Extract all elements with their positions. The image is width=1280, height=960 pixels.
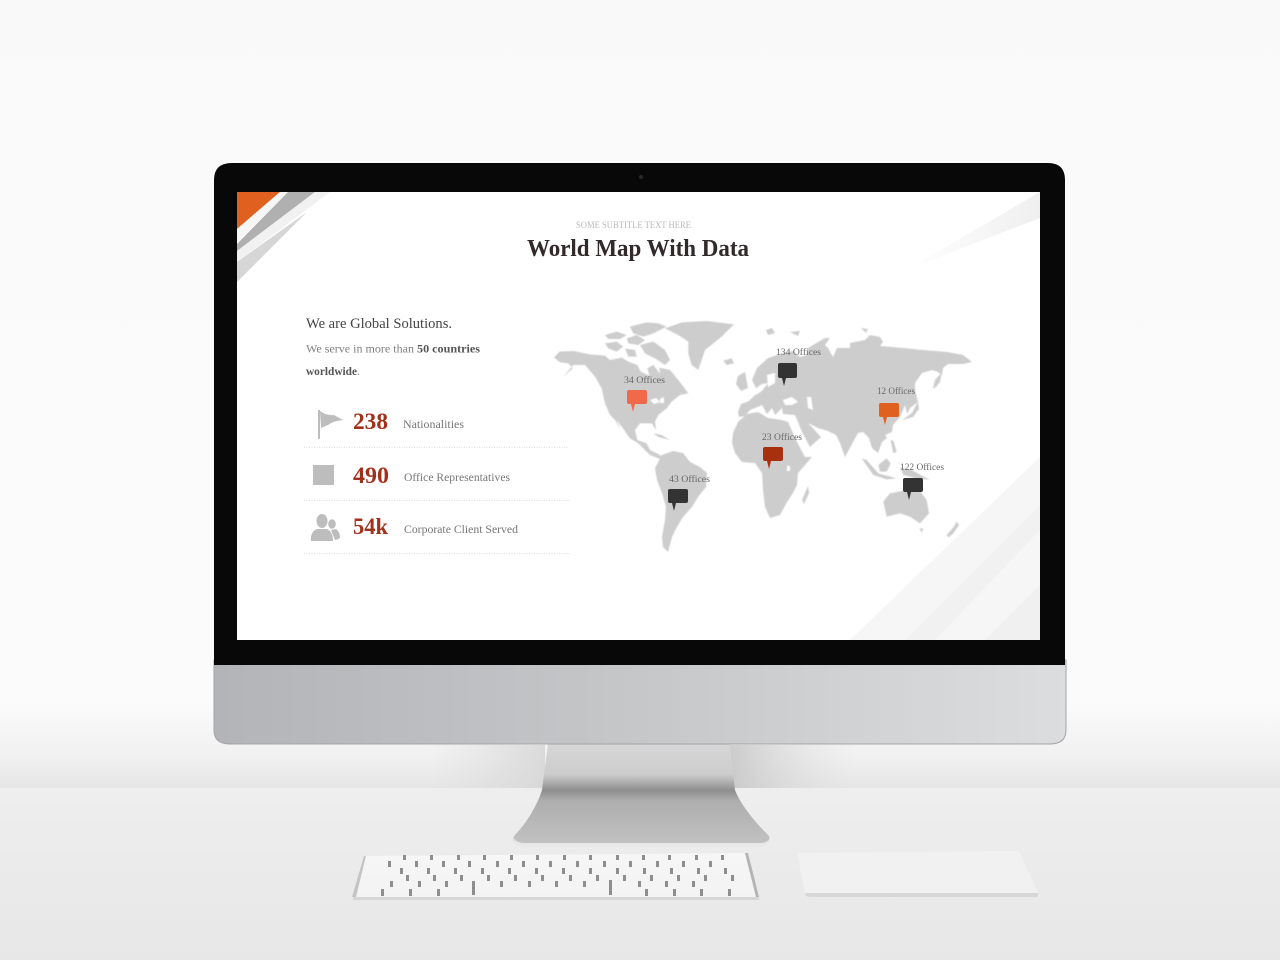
monitor chin — [214, 660, 1066, 744]
pin: 12 offices: 12 Offices — [877, 386, 915, 397]
pin: 12 offices — [877, 386, 915, 425]
camera — [639, 175, 643, 179]
map: uk and ireland — [736, 372, 748, 391]
text block: intro: . — [357, 364, 360, 378]
pin: 34 offices: 34 Offices — [624, 375, 665, 386]
stat row: nationalities — [318, 409, 465, 439]
map: africa — [732, 412, 812, 518]
label: nationalities: Nationalities — [403, 419, 465, 431]
map: sumatra and java — [862, 458, 897, 479]
map: borneo — [878, 458, 891, 472]
text block: intro — [306, 316, 480, 378]
monitor bezel — [214, 163, 1065, 665]
map: madagascar — [802, 486, 809, 504]
pin: 43 offices: 43 Offices — [669, 474, 710, 485]
map: inland seas — [650, 373, 813, 471]
text block: intro: worldwide — [306, 364, 358, 378]
icon: people — [311, 514, 340, 541]
trackpad — [797, 851, 1038, 897]
map: sakhalin — [933, 372, 942, 388]
monitor — [214, 163, 1066, 744]
label: office representatives: Office Representatives — [404, 472, 511, 484]
map: philippines — [891, 440, 897, 453]
divider — [304, 446, 568, 448]
divider — [304, 500, 570, 502]
pin: 23 offices: 23 Offices — [762, 432, 802, 443]
pin: 122 offices — [900, 462, 944, 500]
pin: 43 offices — [668, 474, 710, 511]
world map — [554, 321, 972, 552]
stat row: office representatives — [313, 463, 511, 488]
value: 54k: 54k — [353, 514, 388, 539]
value: 490: 490 — [353, 463, 389, 488]
subtitle: SOME SUBTITLE TEXT HERE — [576, 220, 691, 230]
keyboard: key gaps — [381, 855, 734, 896]
pin: 134 offices: 134 Offices — [776, 347, 821, 358]
map: new zealand — [947, 522, 959, 537]
decoration: top left corner stripes — [237, 192, 330, 282]
pin: 134 offices — [776, 347, 821, 386]
icon: flag — [318, 410, 343, 439]
stat row: corporate clients — [311, 514, 518, 541]
map: new guinea — [900, 467, 930, 480]
decoration: top right streaks — [908, 192, 1040, 269]
monitor stand — [513, 744, 770, 847]
pin: 34 offices — [624, 375, 665, 412]
map: north america, arctic islands, greenland, iceland — [554, 321, 734, 461]
text block: intro: We are Global Solutions. — [306, 316, 452, 332]
label: corporate client served: Corporate Client Served — [404, 524, 518, 536]
title: World Map With Data — [527, 236, 749, 262]
map: tasmania — [919, 528, 923, 533]
text block: intro: We serve in more than — [306, 342, 414, 356]
decoration: bottom right streaks — [850, 457, 1040, 640]
map: japan — [902, 402, 919, 420]
slide screen — [237, 192, 1040, 640]
map: south america — [655, 451, 707, 552]
map: arctic siberian islands — [766, 328, 868, 336]
pin: 122 offices: 122 Offices — [900, 462, 944, 473]
map: australia — [883, 487, 929, 523]
icon: square — [313, 465, 334, 485]
pin: 23 offices — [762, 432, 802, 469]
value: 238: 238 — [353, 409, 388, 434]
text block: intro: 50 countries — [417, 342, 480, 356]
keyboard — [352, 853, 759, 900]
map: eurasia — [738, 335, 972, 457]
divider — [304, 552, 570, 554]
